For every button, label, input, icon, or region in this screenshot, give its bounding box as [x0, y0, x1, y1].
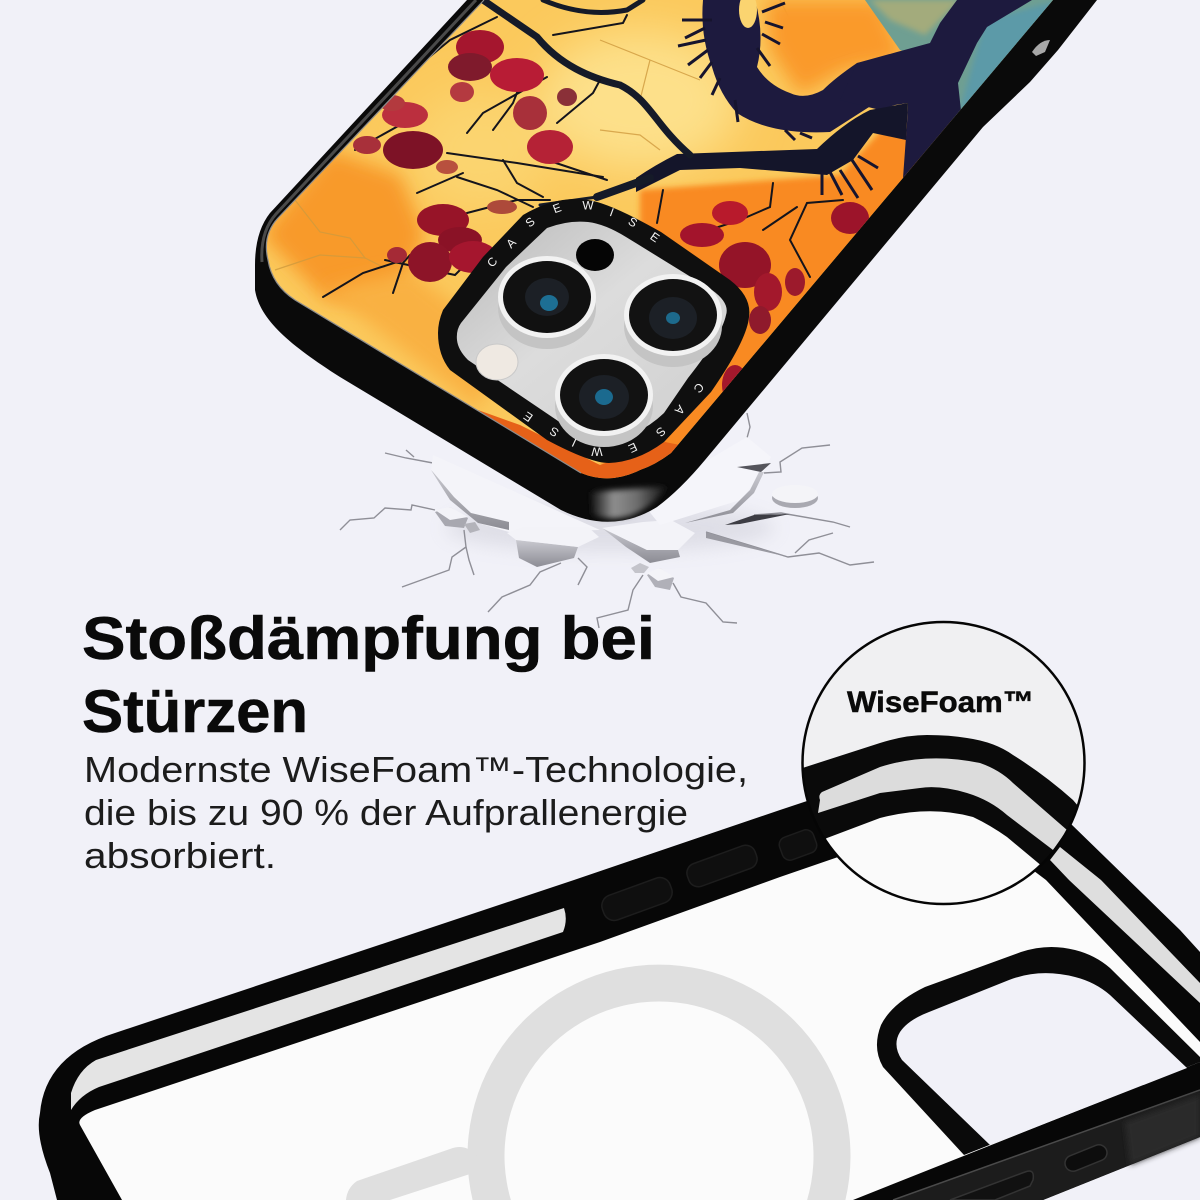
thin twigs — [323, 15, 843, 297]
lens: right — [624, 274, 722, 367]
magnetic ring alignment bar — [346, 1147, 479, 1200]
mic hole — [576, 239, 614, 271]
cracked ground impact — [340, 413, 874, 628]
chunk: large left slab — [431, 455, 600, 532]
main branches — [483, 0, 690, 205]
chunk: mid-right slab — [602, 520, 695, 563]
case body — [255, 0, 1097, 522]
dragon and trunk — [636, 0, 1032, 198]
camera cutout — [877, 947, 1200, 1155]
small rubble pieces — [435, 485, 818, 590]
side button highlight — [1032, 40, 1050, 56]
case rim sheen — [590, 486, 668, 519]
flash — [476, 344, 518, 380]
chunk: right slab — [640, 437, 790, 557]
body text — [84, 749, 748, 876]
body text: absorbiert. — [84, 835, 276, 876]
brand lettering top: CASEWISE — [484, 198, 662, 270]
lower rim face — [893, 1090, 1200, 1200]
brand lettering bottom: CASEWISE — [521, 380, 707, 459]
orange wash upper right — [765, 0, 905, 95]
heading: Stoßdämpfung bei — [82, 605, 655, 672]
side buttons bottom edge — [950, 1142, 1109, 1200]
frame — [39, 750, 1200, 1200]
callout label: WiseFoam™ — [847, 686, 1034, 719]
heading: Stürzen — [82, 678, 308, 745]
body text: Modernste WiseFoam™-Technologie, — [84, 749, 748, 790]
orange wash below branch — [600, 110, 925, 470]
clear case with black frame — [39, 750, 1200, 1200]
callout: WiseFoam magnifier — [801, 620, 1086, 906]
chunk: mid-left slab — [507, 527, 599, 567]
magnified frame detail — [804, 735, 1077, 902]
phone with decorated case — [240, 0, 1097, 522]
side buttons top edge — [599, 828, 819, 924]
vein lines — [275, 0, 784, 270]
red blossoms — [353, 30, 869, 405]
teal wash — [865, 0, 1053, 120]
camera island — [438, 198, 749, 463]
foam strip left — [71, 908, 566, 1110]
foam strip right — [1050, 847, 1200, 1003]
lens: upper left — [498, 256, 596, 349]
case artwork — [266, 0, 1053, 478]
orange wash lower left — [262, 150, 425, 305]
clear back panel — [79, 815, 1200, 1200]
body text: die bis zu 90 % der Aufprallenergie — [84, 792, 688, 833]
heading — [82, 605, 655, 745]
lens: lower — [555, 354, 653, 447]
red-orange lower edge — [478, 410, 678, 478]
magnetic ring — [468, 965, 851, 1200]
